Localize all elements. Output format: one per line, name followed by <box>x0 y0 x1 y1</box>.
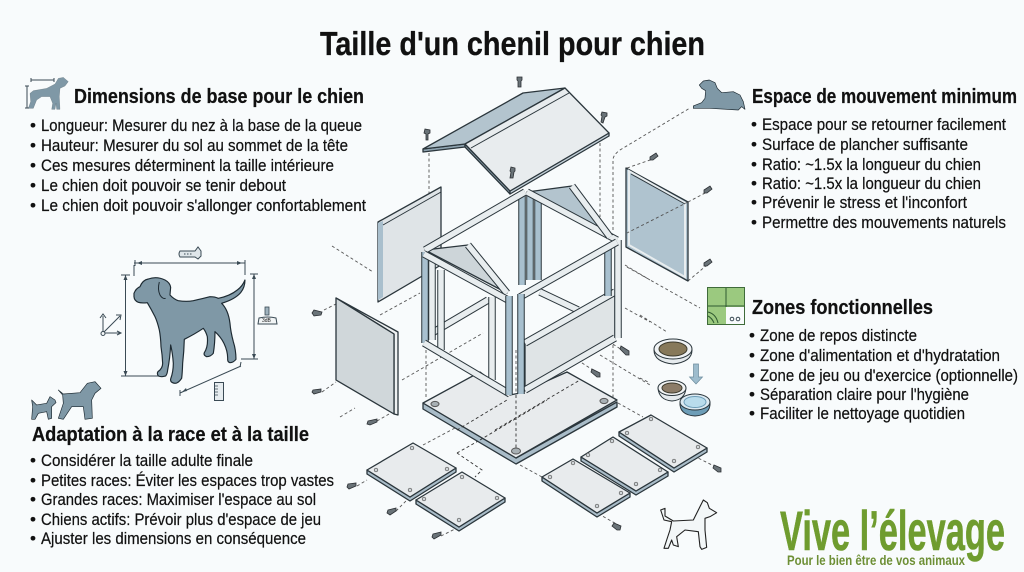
bullet list: Faciliter le nettoyage quotidien <box>760 404 965 423</box>
floor base <box>423 372 617 464</box>
bullet list: • <box>30 136 36 155</box>
bullet list: • <box>30 529 36 548</box>
bullet list: • <box>751 115 757 134</box>
icon: two dogs <box>32 382 101 419</box>
bullet list: Zone de repos distincte <box>760 326 917 345</box>
icon: dog with measurements <box>25 77 68 109</box>
heading: Adaptation à la race et à la taille <box>32 424 309 446</box>
bullet list: Grandes races: Maximiser l'espace au sol <box>41 490 316 509</box>
icon: lying dog <box>693 80 745 110</box>
bullet list: • <box>751 155 757 174</box>
bullet list: • <box>30 176 36 195</box>
bullet list: • <box>30 156 36 175</box>
back gable <box>527 186 610 237</box>
bullet list <box>749 326 1018 423</box>
bullet list: • <box>749 404 755 423</box>
panel: dimensions de base <box>25 77 366 215</box>
bullet list: • <box>749 326 755 345</box>
icon: small bowl <box>658 380 686 401</box>
right wall infill <box>525 292 615 390</box>
icon: scale: 3dB <box>262 318 272 324</box>
icon: ruler <box>214 382 224 400</box>
bullet list: • <box>749 366 755 385</box>
icon: scale <box>258 307 277 324</box>
bullet list <box>30 116 366 215</box>
bullet list: Petites races: Éviter les espaces trop vastes <box>41 471 334 490</box>
bullet list: • <box>751 174 757 193</box>
bullet list: • <box>751 193 757 212</box>
exploded kennel diagram <box>312 77 721 539</box>
upper left wall panel <box>378 187 441 302</box>
right wall panel <box>626 168 688 281</box>
bullet list: • <box>30 451 36 470</box>
icon: axes <box>100 314 121 336</box>
bullet list: • <box>30 471 36 490</box>
icon: bone label <box>179 247 201 259</box>
diagram: dog dimensions <box>100 247 277 400</box>
icon: food bowl <box>654 339 692 364</box>
panel: adaptation race et taille <box>30 382 334 548</box>
bullet list: Le chien doit pouvoir se tenir debout <box>41 176 286 195</box>
bullet list: Chiens actifs: Prévoir plus d'espace de jeu <box>41 510 321 529</box>
bullet list: Le chien doit pouvoir s'allonger confortablement <box>41 196 366 215</box>
title: Taille d'un chenil pour chien <box>320 25 705 62</box>
bullet list <box>30 451 334 548</box>
bullet list: • <box>30 490 36 509</box>
panel: zones fonctionnelles <box>708 288 1018 423</box>
icon: outline dog <box>661 500 717 549</box>
bullet list: • <box>749 346 755 365</box>
bullet list <box>751 115 1006 232</box>
bullet list: • <box>751 213 757 232</box>
bullet list: Surface de plancher suffisante <box>762 135 968 154</box>
logo <box>780 499 1005 568</box>
bullet list: Ratio: ~1.5x la longueur du chien <box>762 155 981 174</box>
bullet list: Ratio: ~1.5x la longueur du chien <box>762 174 981 193</box>
heading: Dimensions de base pour le chien <box>74 86 364 108</box>
roof <box>423 88 609 194</box>
icon: down arrow <box>690 364 702 384</box>
bullet list: • <box>749 385 755 404</box>
bullet list: Considérer la taille adulte finale <box>41 451 253 470</box>
bullet list: Longueur: Mesurer du nez à la base de la queue <box>41 116 362 135</box>
bullet list: Hauteur: Mesurer du sol au sommet de la tête <box>41 136 348 155</box>
bullet list: • <box>751 135 757 154</box>
kennel frame <box>424 186 618 395</box>
dimension arrows <box>121 260 258 396</box>
icon: large dog silhouette <box>134 278 245 383</box>
bullet list: Zone d'alimentation et d'hydratation <box>760 346 1000 365</box>
bullet list: • <box>30 510 36 529</box>
bullet list: Séparation claire pour l'hygiène <box>760 385 969 404</box>
heading: Zones fonctionnelles <box>752 297 933 319</box>
floor panels <box>367 415 707 531</box>
bullet list: • <box>30 116 36 135</box>
logo tagline: Pour le bien être de vos animaux <box>787 552 965 568</box>
side screws <box>312 153 721 539</box>
bullet list: • <box>30 196 36 215</box>
panel: espace de mouvement <box>693 80 1017 232</box>
front gable <box>425 245 507 293</box>
icon: floor plan <box>708 288 744 324</box>
lower left wall panel <box>336 298 398 415</box>
bullet list: Ajuster les dimensions en conséquence <box>41 529 306 548</box>
roof screws <box>424 77 607 178</box>
bullet list: Ces mesures déterminent la taille intérieure <box>41 156 334 175</box>
assembly dashed lines <box>322 108 716 536</box>
bullet list: Prévenir le stress et l'inconfort <box>762 193 967 212</box>
icon: water bowl <box>680 394 710 416</box>
